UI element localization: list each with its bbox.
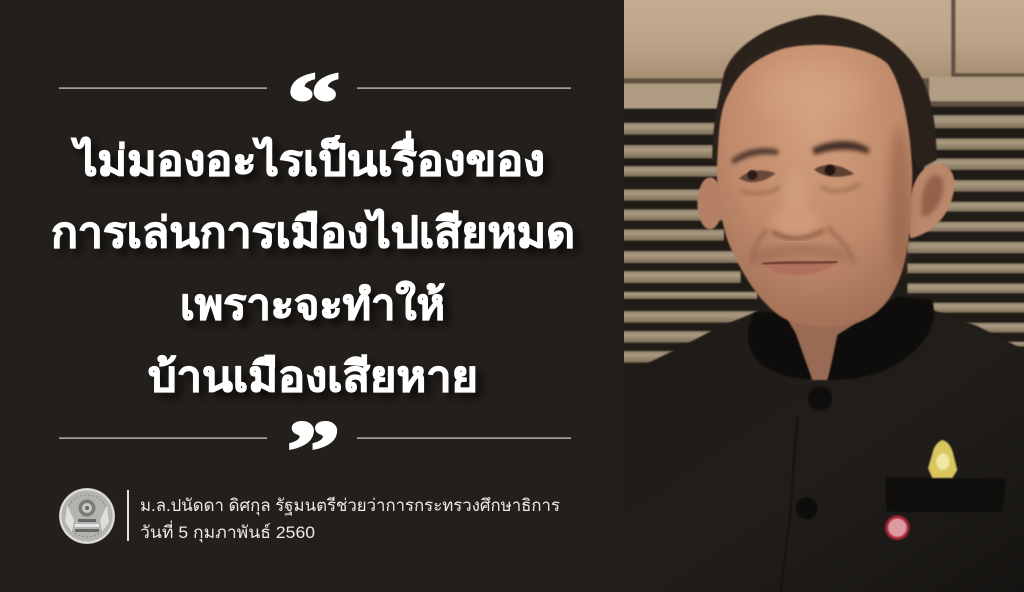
nose bridge [787,180,804,205]
face [717,45,912,327]
icon: gold pin center [936,453,950,470]
suit jacket [611,297,1024,592]
mouth line [762,262,837,264]
right ear inner [921,175,943,217]
left dark panel [0,0,624,592]
icon: ministry seal [59,488,115,544]
neck [786,319,860,381]
moustache shadow [754,250,847,260]
placket seam [783,418,798,572]
cheek shading [889,127,909,273]
button upper [808,386,832,410]
right ear [909,164,955,238]
headline quote text: บ้านเมืองเสียหาย [148,353,478,400]
chest pocket [886,477,1006,512]
icon: pink pin center [888,518,907,537]
hair [712,15,937,170]
lips [762,260,837,275]
eye left [739,170,776,182]
headline quote text: เพราะจะทำให้ [186,286,451,334]
photo background wall [611,0,1024,387]
speaker credit [140,496,560,543]
under eye shadows [741,183,861,194]
nose base shadow [772,230,824,238]
speaker credit: วันที่ 5 กุมภาพันธ์ 2560 [140,520,315,543]
collar [748,297,934,380]
left ear [697,177,723,229]
divider beside credit [127,490,129,541]
headline quote text [51,131,581,406]
pupil left [747,170,757,180]
forehead highlight [754,63,867,117]
button lower [796,497,818,519]
headline quote text: การเล่นการเมืองไปเสียหมด [51,208,575,256]
eye right [814,165,854,177]
eyebrow left [731,148,779,164]
nose [774,214,816,234]
photo: portrait of the minister [611,0,1024,592]
headline quote text: เพราะจะทำให้ [180,280,445,328]
headline quote text: ไม่มองอะไรเป็นเรื่องของ [77,137,551,190]
icon: gold pin [928,440,957,478]
closing quote divider: ” [287,403,340,498]
speaker credit: ม.ล.ปนัดดา ดิศกุล รัฐมนตรีช่วยว่าการกระทรวงศึกษาธิการ [140,496,560,516]
headline quote text: ไม่มองอะไรเป็นเรื่องของ [71,131,545,184]
pupil right [825,165,835,175]
headline quote text: บ้านเมืองเสียหาย [154,359,484,406]
icon: pink pin [885,515,910,540]
head [697,15,955,327]
opening quote divider: “ [287,55,340,150]
headline quote text: การเล่นการเมืองไปเสียหมด [57,214,581,262]
nasolabial folds [752,227,854,263]
eyebrow right [812,141,869,155]
